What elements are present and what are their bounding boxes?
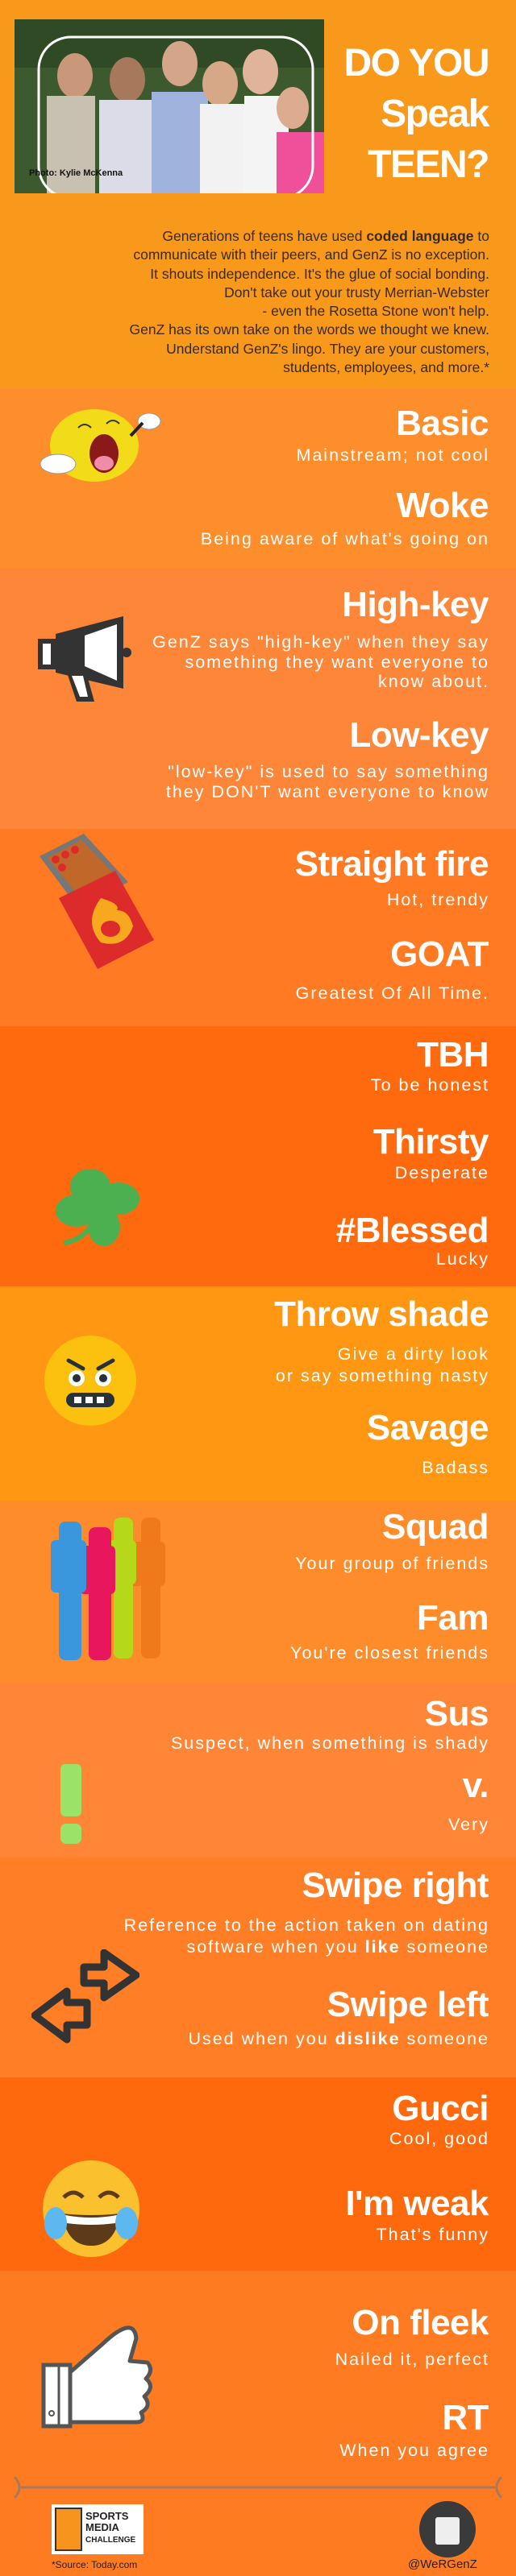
text: Basic: Mainstream; not cool — [296, 445, 489, 465]
heading: Low-key: Low-key — [349, 715, 489, 755]
intro text: students, employees, and more.* — [283, 359, 489, 375]
heading: High-key: High-key — [342, 585, 489, 624]
text: TBH: To be honest — [371, 1075, 489, 1095]
icon: swipe arrows — [31, 1949, 139, 2043]
text: Throw shade: or say something nasty — [276, 1366, 489, 1385]
text: Gucci: Cool, good — [389, 2129, 489, 2148]
heading: On fleek: On fleek — [352, 2303, 489, 2342]
intro text: Understand GenZ's lingo. They are your customers, — [166, 341, 489, 357]
panel: gucci — [0, 2077, 516, 2271]
heading: TBH: TBH — [417, 1035, 489, 1075]
text: High-key: know about. — [378, 672, 489, 691]
text: Low-key: "low-key" is used to say something — [168, 762, 489, 781]
panel: high-key — [0, 568, 516, 829]
heading: Thirsty: Thirsty — [373, 1122, 489, 1162]
panel: throw shade — [0, 1286, 516, 1501]
text: Low-key — [166, 762, 489, 801]
title: TEEN? — [368, 143, 489, 186]
text: Sus: Suspect, when something is shady — [171, 1733, 489, 1753]
heading: I'm weak: I'm weak — [345, 2184, 489, 2223]
heading: Squad: Squad — [382, 1507, 489, 1547]
panel: on fleek — [0, 2271, 516, 2576]
title: Speak — [381, 93, 489, 135]
intro text: Don't take out your trusty Merrian-Webster — [224, 284, 489, 300]
title: DO YOU — [344, 42, 489, 85]
text: Squad: Your group of friends — [295, 1554, 489, 1573]
text: On fleek: Nailed it, perfect — [335, 2350, 489, 2369]
logo: sports media challenge — [52, 2504, 144, 2554]
icon: laughing emoji — [43, 2160, 139, 2257]
icon: exclamation — [60, 1764, 81, 1844]
heading: v.: v. — [463, 1766, 489, 1805]
source text: *Source: Today.com — [52, 2559, 137, 2570]
icon: clover — [56, 1169, 139, 1246]
text: GOAT: Greatest Of All Time. — [296, 984, 489, 1003]
logo: sports media challenge: MEDIA — [85, 2521, 119, 2533]
text: Savage: Badass — [422, 1458, 489, 1477]
heading: Savage: Savage — [367, 1408, 489, 1447]
heading: Throw shade: Throw shade — [274, 1294, 489, 1334]
text: #Blessed: Lucky — [436, 1249, 489, 1269]
text: High-key: something they want everyone to — [185, 652, 489, 672]
intro text: GenZ has its own take on the words we thought we knew. — [129, 321, 489, 338]
heading: Woke: Woke — [396, 486, 489, 525]
panel: straight fire — [0, 829, 516, 1026]
heading: Sus: Sus — [425, 1694, 489, 1733]
intro text: - even the Rosetta Stone won't help. — [262, 303, 489, 319]
text: Swipe left: Used when you dislike someone — [188, 2029, 489, 2048]
heading: Swipe left: Swipe left — [327, 1985, 489, 2024]
icon: squad figures — [51, 1518, 165, 1660]
icon: yawning emoji — [40, 409, 161, 482]
text: Throw shade: Give a dirty look — [338, 1344, 489, 1364]
text: Throw shade — [276, 1344, 489, 1385]
heading: Fam: Fam — [417, 1598, 489, 1638]
intro text: Generations of teens have used coded language to — [162, 228, 489, 244]
panel: sus — [0, 1684, 516, 1857]
text: Low-key: they DON'T want everyone to know — [166, 781, 489, 801]
title — [344, 42, 490, 186]
text: Very: Very — [448, 1815, 489, 1834]
intro text — [129, 228, 489, 375]
photo: Photo: Kylie McKenna — [29, 168, 123, 178]
text: Thirsty: Desperate — [395, 1163, 489, 1182]
intro text: communicate with their peers, and GenZ is no exception. — [133, 246, 489, 263]
text: Fam: You're closest friends — [290, 1643, 489, 1663]
icon: matchbox — [40, 834, 154, 969]
heading: GOAT: GOAT — [390, 934, 489, 974]
heading: Gucci: Gucci — [392, 2089, 489, 2128]
icon: angry face — [44, 1336, 136, 1426]
icon: megaphone — [38, 616, 131, 702]
panel: basic/woke — [0, 388, 516, 568]
heading: RT: RT — [442, 2398, 489, 2437]
icon: thumbs up — [42, 2325, 153, 2428]
text: Woke: Being aware of what's going on — [201, 529, 489, 549]
panel: swipe — [0, 1857, 516, 2077]
text: Straight fire: Hot, trendy — [387, 890, 489, 909]
heading: Basic: Basic — [396, 404, 489, 443]
logo: sports media challenge: CHALLENGE — [85, 2536, 135, 2545]
text: RT: When you agree — [339, 2441, 489, 2460]
text: Swipe right: software when you like someone — [186, 1937, 489, 1957]
panel: squad — [0, 1501, 516, 1684]
header panel — [0, 0, 516, 388]
panel: tbh — [0, 1026, 516, 1286]
text: Swipe right: Reference to the action taken on dating — [124, 1915, 489, 1935]
divider — [14, 2476, 502, 2499]
heading: #Blessed: #Blessed — [336, 1211, 489, 1250]
avatar — [419, 2501, 476, 2557]
text: High-key: GenZ says "high-key" when they say — [152, 632, 489, 652]
text: Swipe right — [124, 1915, 489, 1957]
heading: Straight fire: Straight fire — [295, 844, 489, 884]
intro text: It shouts independence. It's the glue of social bonding. — [150, 266, 489, 282]
text: I'm weak: That's funny — [377, 2225, 489, 2244]
heading: Swipe right: Swipe right — [302, 1866, 489, 1905]
logo: sports media challenge: SPORTS — [85, 2510, 128, 2522]
text: High-key — [152, 632, 489, 691]
photo — [15, 19, 324, 193]
handle text: @WeRGenZ — [408, 2557, 477, 2571]
